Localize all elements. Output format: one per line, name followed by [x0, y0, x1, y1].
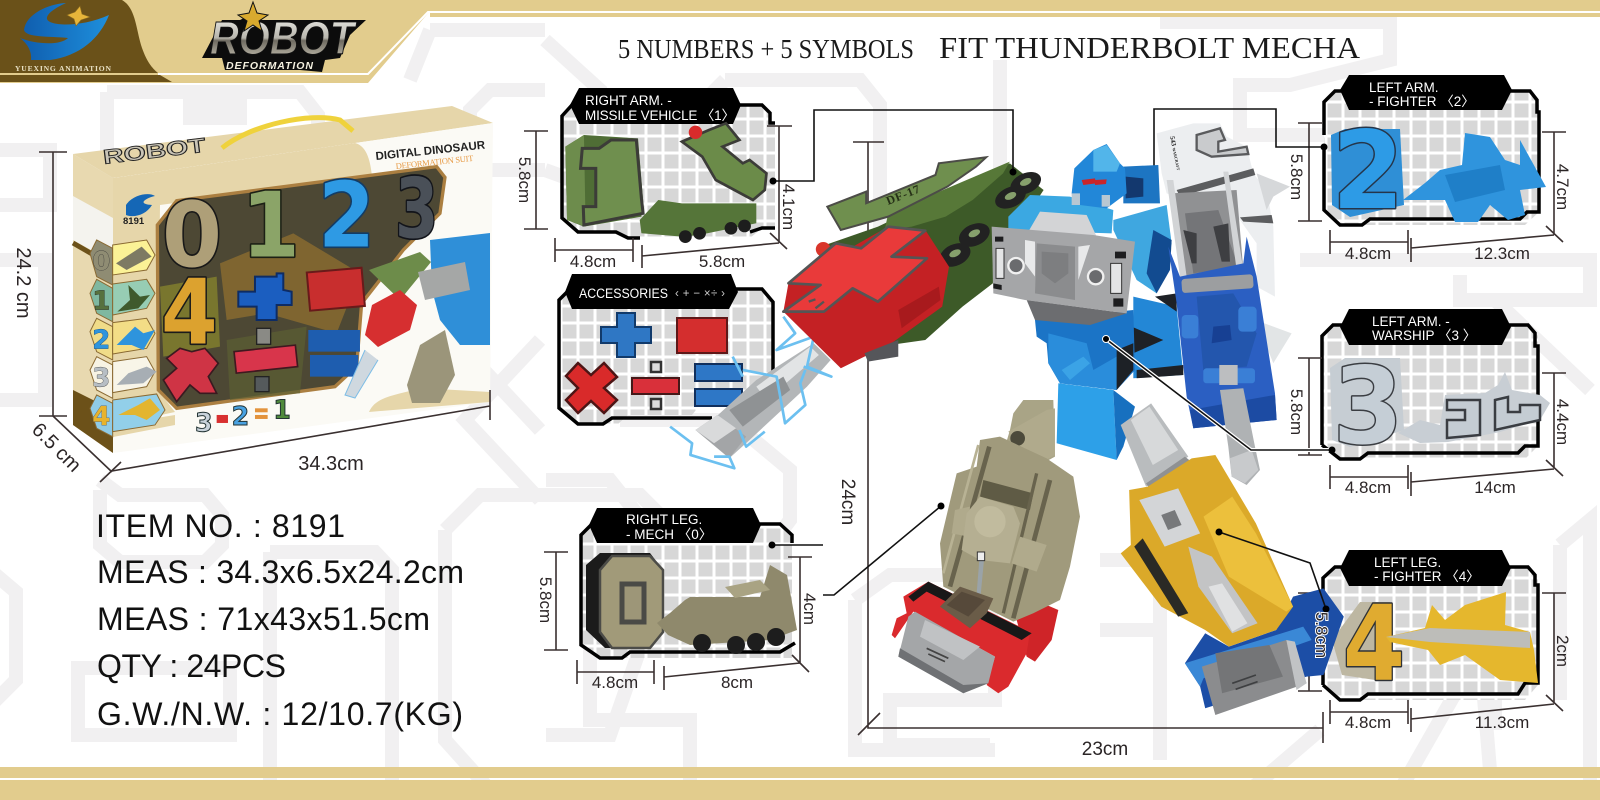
box artwork in source-pixel space: 1: [92, 286, 110, 316]
product box: 8191: [123, 216, 145, 227]
fighter jet toy: [1403, 133, 1546, 222]
item specification text: ITEM NO. : 8191: [96, 508, 345, 544]
dimensions: left leg fighter: [1298, 593, 1572, 732]
hip block: [1057, 383, 1117, 460]
side thumbnails: [90, 240, 113, 285]
dimensions: right arm: 4.1cm: [779, 184, 798, 230]
lightning: [670, 317, 831, 468]
tank toy: [657, 565, 797, 645]
dimensions: right leg: 4cm: [800, 593, 819, 625]
equals piece: [695, 364, 742, 381]
top header band: [0, 0, 1600, 83]
panel: right arm missile vehicle: MISSILE VEHICLE 〈1〉: [585, 108, 735, 123]
white plate: [1157, 123, 1275, 297]
panel: accessories: ‹ + − ×÷ ›: [675, 288, 725, 300]
overall robot dimension lines: 24cm: [837, 479, 858, 525]
panel header: [1340, 75, 1512, 110]
item specification text: MEAS : 71x43x51.5cm: [97, 601, 430, 637]
panel: left arm warship: WARSHIP 〈3 〉: [1372, 328, 1476, 343]
3-2=1 on box: [195, 394, 291, 438]
ROBOT deformation logo: ROBOT: [210, 12, 357, 64]
panel header: [1340, 550, 1511, 586]
grey foot: [898, 612, 995, 693]
dimensions: left arm warship: [1287, 358, 1572, 497]
arm wheels: [1007, 167, 1045, 199]
box brand mark and item number: [126, 194, 155, 216]
product box: [73, 106, 493, 453]
box dimension: depth 6.5 cm: 6.5 cm: [27, 419, 85, 477]
item specification text: [96, 508, 464, 732]
missile arm and red cross fist: [670, 157, 1045, 468]
torso and left arm: [992, 123, 1292, 485]
3-2=1 on box: 3: [195, 408, 213, 438]
box artwork in source-pixel space: 0: [92, 247, 110, 277]
box artwork in source-pixel space: 3: [395, 160, 438, 257]
yellow leg: [1121, 455, 1293, 647]
missile arm and red cross fist: DF-17: [884, 182, 922, 208]
leader line: left arm fighter: [1150, 109, 1328, 174]
trough: [1170, 190, 1243, 277]
overall robot dimension lines: [837, 142, 1323, 760]
dimensions: right arm: [515, 126, 798, 271]
waist: [1035, 310, 1135, 390]
box window: [157, 167, 445, 408]
item specification text: MEAS : 34.3x6.5x24.2cm: [97, 554, 464, 590]
forearm cannon: [1220, 388, 1260, 485]
number 4 toy: [1332, 602, 1390, 680]
grey foot: [1202, 640, 1307, 715]
right leg and red foot: [892, 400, 1080, 693]
chest plate: [1027, 300, 1127, 325]
red rectangle piece: [677, 318, 727, 353]
multiply piece: [566, 363, 617, 413]
plus piece: [601, 313, 651, 357]
title: FIT THUNDERBOLT MECHA: [939, 30, 1361, 65]
panel: right arm missile vehicle: RIGHT ARM. -: [585, 93, 672, 108]
product name: [375, 139, 487, 173]
left leg and blue foot: [1121, 403, 1344, 715]
arm body: [821, 163, 1044, 347]
red back foot: [1017, 605, 1058, 662]
box dimension: width 34.3cm: [112, 390, 490, 475]
product name: DEFORMATION SUIT: [395, 153, 475, 171]
overall robot dimension lines: 23cm: [1082, 739, 1128, 760]
back shoulder: [1123, 165, 1160, 203]
dimensions: left arm fighter: 5.8cm: [1287, 154, 1306, 200]
yellow handle: [222, 118, 353, 148]
dimensions: right leg: 5.8cm: [536, 577, 555, 623]
fighter plane toy: [1386, 592, 1538, 683]
number 3 toy: [1330, 358, 1404, 447]
missile plate: [827, 157, 986, 230]
box top face: [73, 106, 493, 178]
box front face: [113, 123, 493, 453]
brown logo corner: [0, 0, 172, 82]
panel: right leg mech: - MECH 〈0〉: [626, 527, 712, 542]
vehicle: [640, 200, 756, 237]
title: [618, 30, 1361, 65]
bucket: [940, 587, 993, 628]
box artwork in source-pixel space: 4: [161, 260, 218, 365]
panel: left arm warship: [1322, 309, 1550, 468]
panel header: [565, 274, 738, 309]
red fist body: [783, 227, 949, 368]
dimensions: right arm: 5.8cm: [699, 252, 745, 271]
dimensions: left arm warship: 5.8cm: [1287, 389, 1306, 435]
left shoulder: [1008, 195, 1113, 233]
leg body: [940, 437, 1080, 622]
brand logo: swoosh and star: YUEXING ANIMATION: [15, 64, 112, 73]
3-2=1 on box: 1: [273, 394, 291, 424]
panel: left leg fighter: - FIGHTER 〈4〉: [1374, 569, 1480, 584]
box side panel: [73, 154, 113, 453]
bottom gold band: [0, 767, 1600, 800]
panel: left arm fighter: [1324, 75, 1546, 234]
panel: accessories: ACCESSORIES: [579, 286, 668, 301]
missile launcher: [682, 123, 766, 200]
ROBOT deformation logo: [202, 2, 366, 72]
window digits: 0: [162, 183, 222, 288]
product name: DIGITAL DINOSAUR: [375, 139, 486, 163]
panel header: [589, 508, 761, 543]
blue foot: [1185, 588, 1344, 708]
right shoulder: [1113, 205, 1172, 293]
dimensions: right arm: 4.8cm: [570, 252, 616, 271]
box artwork in source-pixel space: 2: [92, 325, 110, 355]
3-2=1 on box: 2: [232, 401, 249, 431]
panel: left leg fighter: LEFT LEG.: [1374, 555, 1441, 570]
warship toy: [1398, 372, 1550, 443]
panel: left arm fighter: 2: [1332, 109, 1404, 234]
panel: left arm warship: LEFT ARM. -: [1372, 314, 1450, 329]
box artwork in source-pixel space: 4: [92, 402, 110, 432]
dimensions: left arm warship: 4.8cm: [1345, 478, 1391, 497]
title: 5 NUMBERS + 5 SYMBOLS: [618, 34, 914, 64]
leader line: right arm: [770, 110, 1016, 184]
leader line: left arm warship: [1102, 336, 1336, 454]
dimensions: left arm warship: 4.4cm: [1553, 399, 1572, 445]
number 0 toy: [586, 553, 663, 648]
missile beam: [885, 162, 1010, 230]
thigh: [1005, 400, 1055, 467]
dimensions: left arm fighter: 4.7cm: [1553, 164, 1572, 210]
panel header: [1340, 309, 1511, 345]
leader line: left leg: [1216, 528, 1330, 612]
number 1 toy: [565, 135, 643, 227]
robot figure: [670, 123, 1344, 715]
panel: right arm missile vehicle: [562, 88, 775, 243]
dimensions: left arm fighter: 12.3cm: [1474, 244, 1530, 263]
panel: accessories: [559, 274, 773, 424]
red foot: [892, 582, 1030, 693]
box dimension: height 24.2 cm: 24.2 cm: [12, 247, 34, 319]
panel: left arm fighter: LEFT ARM.: [1369, 80, 1439, 95]
box dimension: depth 6.5 cm: [27, 416, 121, 482]
item specification text: G.W./N.W. : 12/10.7(KG): [97, 696, 463, 732]
minus piece: [632, 378, 679, 394]
panel: left leg fighter: 4: [1343, 583, 1405, 705]
dimensions: right leg: [536, 552, 819, 692]
silver shin: [1121, 403, 1188, 487]
dimensions: left arm fighter: 4.8cm: [1345, 244, 1391, 263]
box artwork in source-pixel space: [90, 160, 445, 438]
dimensions: left arm warship: 14cm: [1474, 478, 1516, 497]
dimensions: left leg fighter: 2cm: [1553, 635, 1572, 667]
toys in source-pixel space: [565, 123, 766, 243]
box lid logo: ROBOT: [102, 135, 207, 169]
panel header: [570, 88, 741, 124]
number 2 toy: [1331, 129, 1404, 217]
chest plate: [962, 497, 1020, 563]
ROBOT deformation logo: DEFORMATION: [226, 60, 313, 72]
dimensions: left leg fighter: 4.8cm: [1345, 713, 1391, 732]
back blue: [1133, 297, 1183, 378]
dimensions: right arm: 5.8cm: [515, 157, 534, 203]
red cross face: [783, 227, 927, 312]
box artwork in source-pixel space: 2: [318, 164, 375, 269]
box artwork in source-pixel space: 1: [241, 174, 300, 279]
box dimension: height 24.2 cm: [12, 152, 67, 416]
brand logo: swoosh and star: [15, 3, 112, 73]
panel: right leg mech: RIGHT LEG.: [626, 512, 702, 527]
blue forearm: [1168, 237, 1277, 428]
gun barrel: [709, 343, 831, 458]
dimension label over left foot: 5.8cm: [1312, 612, 1331, 658]
box artwork in source-pixel space: 3: [92, 364, 110, 394]
leader line: right leg: [768, 502, 944, 595]
head: [1072, 144, 1127, 208]
dimensions: left arm fighter: [1287, 123, 1572, 263]
white fin: [1260, 322, 1292, 363]
panel: left leg fighter: [1323, 550, 1538, 705]
dimensions: left leg fighter: 11.3cm: [1475, 713, 1529, 732]
panel: left arm fighter: - FIGHTER 〈2〉: [1369, 94, 1475, 109]
dimensions: right leg: 4.8cm: [592, 673, 638, 692]
gold stripe across the top: [0, 0, 1600, 83]
item specification text: QTY : 24PCS: [97, 648, 286, 684]
robot on box art: [369, 252, 431, 300]
box dimension: width 34.3cm: 34.3cm: [298, 453, 364, 475]
torso and left arm: 543 WARCRAFT: [1168, 136, 1182, 171]
panel: left arm warship: 3: [1333, 345, 1403, 468]
panel: right leg mech: [581, 508, 797, 658]
dimensions: right leg: 8cm: [721, 673, 753, 692]
